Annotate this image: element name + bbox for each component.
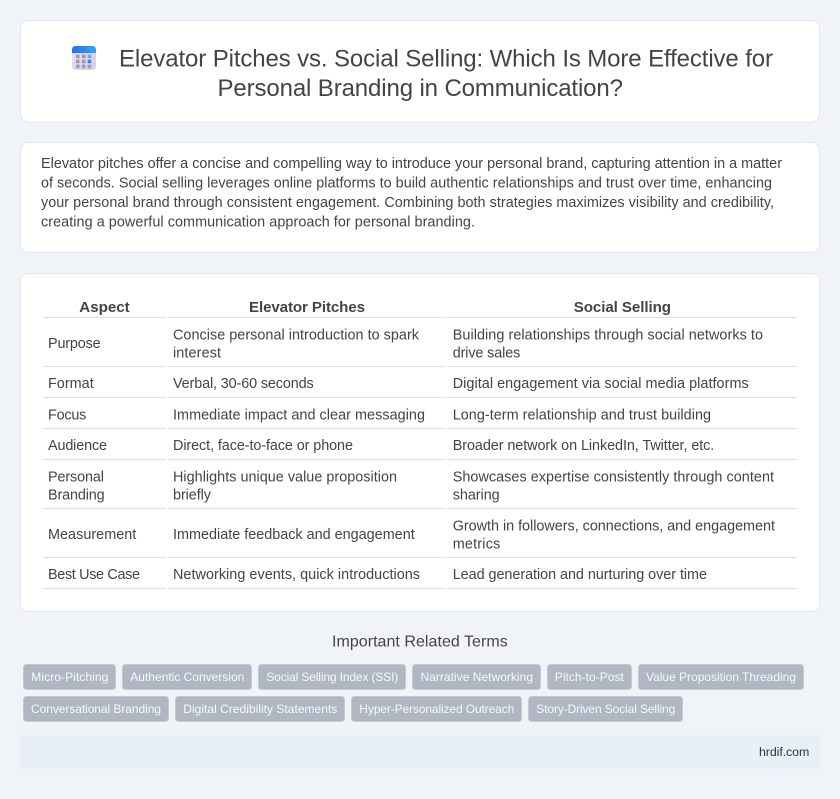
panel: introduction bbox=[20, 142, 820, 252]
intro text: Elevator pitches offer a concise and compelling way to introduce your personal brand, capturing attention in a matter bbox=[41, 156, 782, 172]
tag bbox=[638, 664, 804, 690]
panel: title card bbox=[20, 20, 820, 122]
row: audience: Broader network on LinkedIn, Twitter, etc. bbox=[453, 438, 714, 454]
row: personal branding bbox=[48, 469, 774, 503]
tag bbox=[24, 696, 168, 722]
row: purpose: drive sales bbox=[453, 345, 520, 361]
tag bbox=[122, 664, 252, 690]
row: format: Verbal, 30-60 seconds bbox=[173, 376, 314, 392]
row: personal branding: briefly bbox=[173, 487, 212, 503]
tag bbox=[176, 696, 344, 722]
row: best use case: Best Use Case bbox=[48, 567, 140, 583]
heading: important related terms: Important Related Terms bbox=[332, 634, 508, 651]
tag bbox=[24, 664, 116, 690]
row: measurement: Measurement bbox=[48, 527, 136, 543]
tag: Micro-Pitching bbox=[31, 670, 108, 684]
row: format bbox=[48, 376, 749, 392]
row: focus: Immediate impact and clear messaging bbox=[173, 407, 425, 423]
row: measurement bbox=[48, 518, 775, 552]
title: Personal Branding in Communication? bbox=[218, 75, 623, 102]
row: audience: Audience bbox=[48, 438, 107, 454]
intro text: creating a powerful communication approach for personal branding. bbox=[41, 214, 475, 230]
tag: Digital Credibility Statements bbox=[183, 702, 337, 716]
tag: Social Selling Index (SSI) bbox=[266, 670, 398, 684]
title bbox=[119, 46, 773, 102]
row: audience: Direct, face-to-face or phone bbox=[173, 438, 353, 454]
footer: hrdif.com bbox=[759, 745, 809, 759]
row: measurement: Growth in followers, connections, and engagement bbox=[453, 518, 775, 534]
tag bbox=[412, 664, 540, 690]
row: purpose: Concise personal introduction to spark bbox=[173, 327, 420, 343]
table header: Social Selling bbox=[574, 299, 671, 316]
row: focus: Focus bbox=[48, 407, 86, 423]
row: purpose: Building relationships through social networks to bbox=[453, 327, 763, 343]
icon: calendar bbox=[72, 46, 96, 70]
row: personal branding: Showcases expertise consistently through content bbox=[453, 469, 774, 485]
tag: Story-Driven Social Selling bbox=[536, 702, 675, 716]
tag: Pitch-to-Post bbox=[555, 670, 624, 684]
panel: comparison table bbox=[20, 274, 820, 612]
tag: Value Proposition Threading bbox=[646, 670, 796, 684]
tag list bbox=[24, 664, 804, 722]
tag: Hyper-Personalized Outreach bbox=[359, 702, 514, 716]
row: measurement: metrics bbox=[453, 536, 500, 552]
footer bbox=[20, 735, 820, 769]
table header: Elevator Pitches bbox=[249, 299, 365, 316]
intro text bbox=[41, 156, 782, 230]
row: audience bbox=[48, 438, 714, 454]
row: purpose: Purpose bbox=[48, 336, 101, 352]
row: personal branding: Highlights unique value proposition bbox=[173, 469, 397, 485]
intro text: your personal brand through consistent engagement. Combining both strategies maximizes visibility and credibility, bbox=[41, 195, 774, 211]
row: personal branding: Personal bbox=[48, 469, 104, 485]
tag: Authentic Conversion bbox=[130, 670, 244, 684]
row: format: Digital engagement via social media platforms bbox=[453, 376, 749, 392]
row: format: Format bbox=[48, 376, 94, 392]
row: purpose bbox=[48, 327, 763, 361]
row: personal branding: sharing bbox=[453, 487, 500, 503]
row: personal branding: Branding bbox=[48, 487, 105, 503]
tag bbox=[548, 664, 632, 690]
intro text: of seconds. Social selling leverages online platforms to build authentic relationships and trust over time, enhancing bbox=[41, 175, 772, 191]
row: best use case: Networking events, quick introductions bbox=[173, 567, 420, 583]
row: focus: Long-term relationship and trust building bbox=[453, 407, 711, 423]
row: measurement: Immediate feedback and engagement bbox=[173, 527, 415, 543]
table header: Aspect bbox=[79, 299, 130, 316]
tag bbox=[528, 696, 682, 722]
title: Elevator Pitches vs. Social Selling: Which Is More Effective for bbox=[119, 46, 773, 72]
tag: Conversational Branding bbox=[31, 702, 161, 716]
row: focus bbox=[48, 407, 711, 423]
row: purpose: interest bbox=[173, 345, 221, 361]
tag bbox=[352, 696, 522, 722]
row: best use case: Lead generation and nurturing over time bbox=[453, 567, 707, 583]
tag: Narrative Networking bbox=[420, 670, 533, 684]
row: best use case bbox=[48, 567, 707, 583]
tag bbox=[258, 664, 406, 690]
table header bbox=[79, 299, 671, 316]
